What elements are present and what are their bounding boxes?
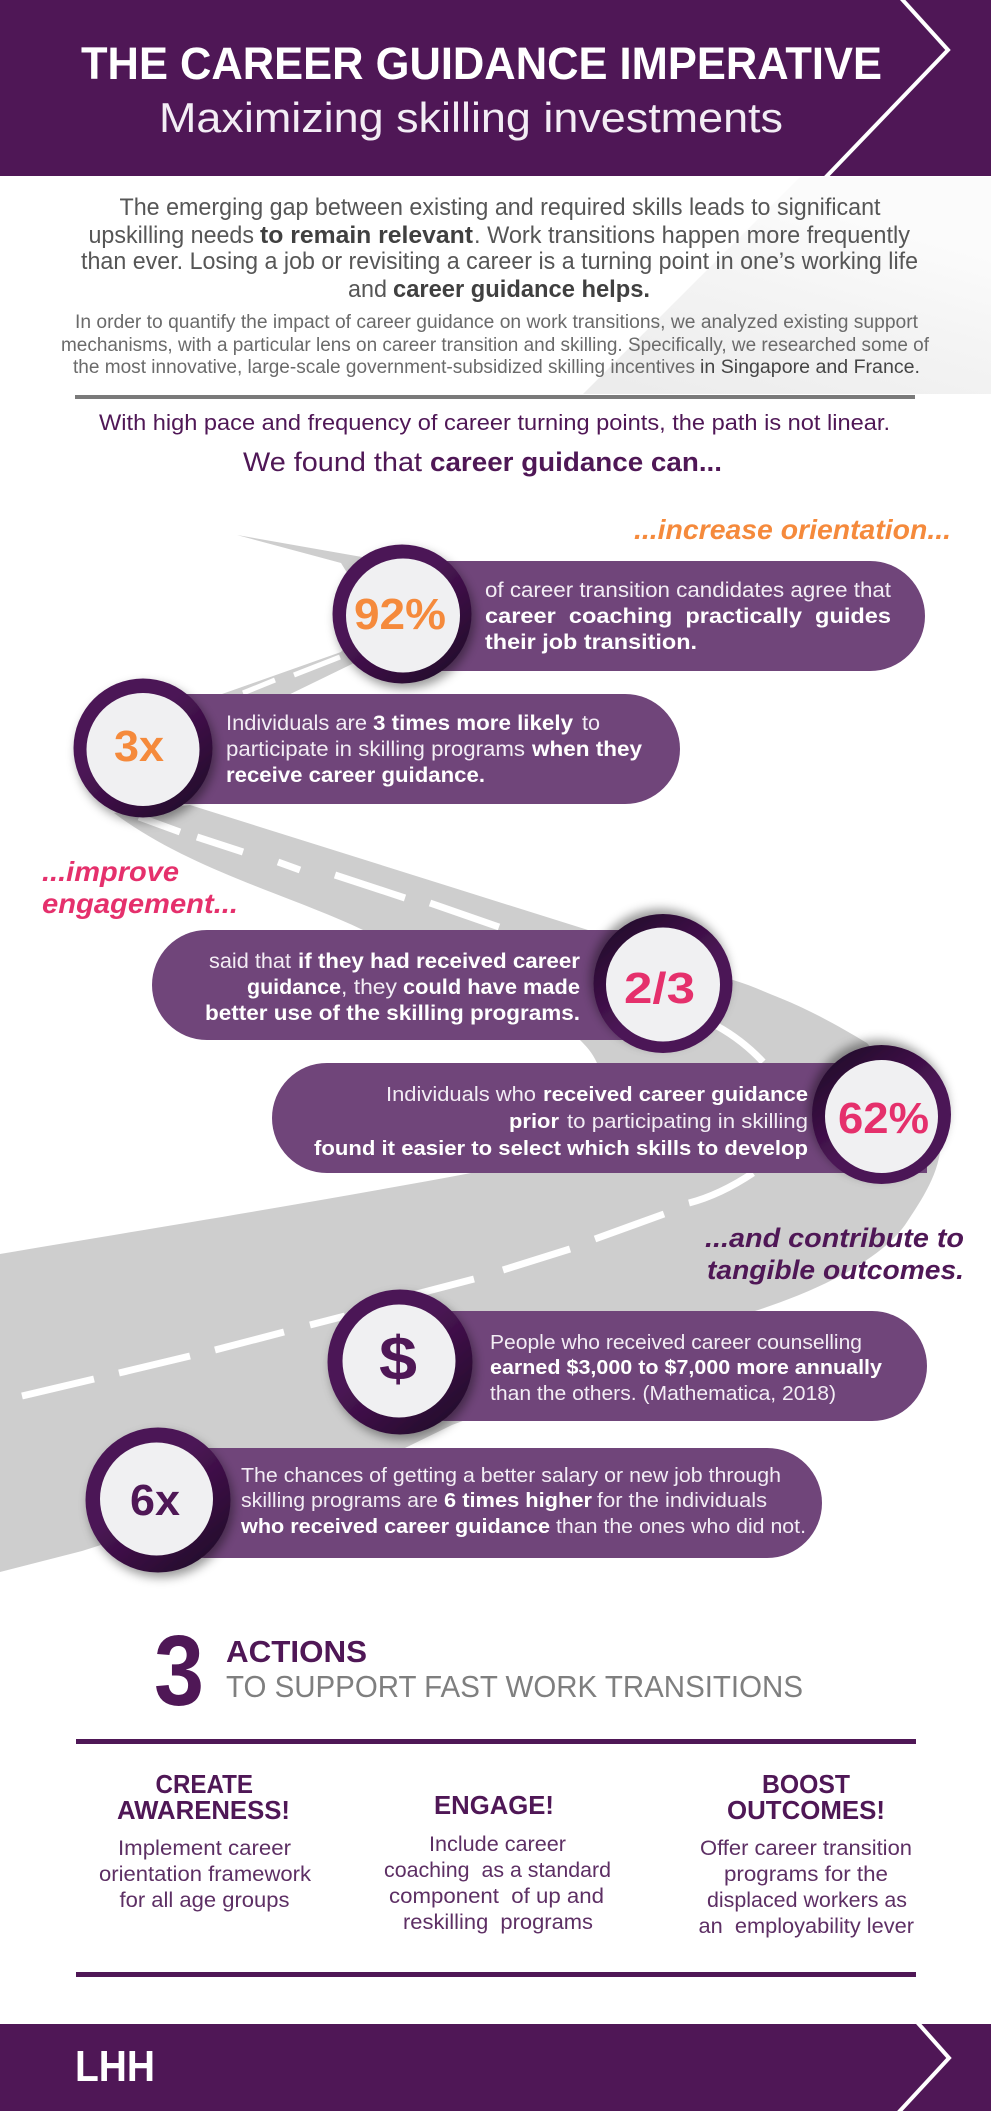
card: 3x: [74, 678, 680, 818]
actions heading: TO SUPPORT FAST WORK TRANSITIONS: [226, 1669, 803, 1704]
action: engage: component of up and: [389, 1885, 604, 1908]
intro text block: The emerging gap between existing and required skills leads to significant: [120, 194, 881, 221]
action: boost outcomes: displaced workers as: [707, 1889, 907, 1912]
card: 6x: skilling programs are: [241, 1490, 438, 1512]
card: 2/3: could have made: [403, 976, 580, 999]
card: 6x: [86, 1428, 822, 1572]
card: 62%: received career guidance: [543, 1084, 808, 1106]
action: boost outcomes: [698, 1769, 914, 1938]
card: 3x: when they: [531, 738, 642, 761]
card: 6x: 6 times higher: [444, 1490, 592, 1512]
action: create awareness: orientation framework: [99, 1863, 312, 1886]
card: 92%: [332, 544, 925, 684]
action: create awareness: Implement career: [118, 1837, 291, 1860]
section label: improve engagement: engagement...: [42, 888, 238, 919]
action: engage: reskilling programs: [403, 1911, 593, 1934]
card: 62%: [272, 1045, 951, 1184]
card: 92%: their job transition.: [485, 631, 697, 654]
action: boost outcomes: Offer career transition: [700, 1837, 912, 1860]
action: engage: Include career: [429, 1833, 566, 1856]
action: create awareness: AWARENESS!: [117, 1795, 290, 1825]
section label: tangible outcomes: tangible outcomes.: [707, 1255, 964, 1285]
card: 2/3: , they: [341, 976, 398, 999]
intro text block: in Singapore and France.: [700, 357, 920, 378]
action: engage: coaching as a standard: [384, 1859, 611, 1882]
intro text block: to remain relevant: [260, 222, 473, 249]
card: 3x: to: [582, 712, 600, 735]
card: 6x: for the individuals: [597, 1490, 767, 1512]
action: create awareness: [99, 1769, 312, 1912]
actions heading: [154, 1615, 803, 1727]
card: 2/3: 2/3: [624, 964, 695, 1013]
section label: tangible outcomes: ...and contribute to: [705, 1223, 964, 1253]
card: 3x: 3 times more likely: [373, 712, 573, 735]
actions heading: ACTIONS: [226, 1634, 367, 1669]
card: 62%: found it easier to select which skills to develop: [314, 1138, 808, 1160]
header banner: [0, 0, 991, 178]
intro text block: career guidance helps.: [393, 276, 650, 303]
card: 6x: 6x: [130, 1476, 181, 1525]
card: 62%: to participating in skilling: [567, 1111, 808, 1133]
card: 2/3: guidance: [247, 976, 341, 999]
card: 3x: Individuals are: [226, 712, 367, 735]
icon: header chevron: [825, 0, 948, 178]
intro text block: the most innovative, large-scale government-subsidized skilling incentives: [73, 357, 695, 378]
action: boost outcomes: OUTCOMES!: [727, 1795, 885, 1825]
intro background shape: [583, 177, 991, 394]
subtitle: Maximizing skilling investments: [159, 94, 783, 141]
section label: improve engagement: ...improve: [42, 856, 179, 887]
card: 6x: who received career guidance: [240, 1516, 550, 1538]
card: 92%: of career transition candidates agree that: [485, 579, 891, 602]
intro text block: [61, 194, 930, 378]
action: boost outcomes: programs for the: [724, 1863, 888, 1886]
intro text block: and: [348, 276, 387, 303]
card: dollar: than the others. (Mathematica, 2018): [490, 1383, 836, 1405]
card: 92%: 92%: [354, 590, 446, 639]
card: 6x: than the ones who did not.: [556, 1516, 806, 1538]
card: 62%: 62%: [838, 1094, 929, 1143]
card: 2/3: [152, 914, 732, 1053]
card: 2/3: better use of the skilling programs.: [205, 1002, 580, 1025]
logo wordmark: LHH: [75, 2042, 155, 2091]
intro text block: mechanisms, with a particular lens on career transition and skilling. Specifically, we researched some of: [61, 335, 930, 356]
card: 2/3: if they had received career: [298, 950, 580, 973]
card: 6x: The chances of getting a better salary or new job through: [241, 1465, 781, 1487]
card: 2/3: said that: [209, 950, 291, 973]
intro text block: upskilling needs: [88, 222, 254, 249]
findings heading: We found that: [243, 447, 423, 477]
winding road: [0, 535, 941, 1572]
title: THE CAREER GUIDANCE IMPERATIVE: [81, 38, 882, 89]
card: 3x: receive career guidance.: [226, 764, 485, 787]
action: engage: [384, 1790, 611, 1934]
findings heading: career guidance can...: [430, 447, 722, 477]
lead-in text: With high pace and frequency of career turning points, the path is not linear.: [99, 410, 890, 435]
intro text block: than ever. Losing a job or revisiting a career is a turning point in one’s working life: [81, 248, 918, 275]
card: dollar: $: [379, 1325, 417, 1394]
action: boost outcomes: an employability lever: [698, 1915, 914, 1938]
intro text block: . Work transitions happen more frequently: [474, 222, 910, 249]
section label: tangible outcomes: [705, 1223, 964, 1285]
card: dollar: [328, 1290, 927, 1434]
action: engage: ENGAGE!: [434, 1790, 554, 1820]
card: dollar: People who received career counselling: [490, 1332, 862, 1354]
card: dollar: earned $3,000 to $7,000 more annually: [490, 1357, 883, 1379]
intro text block: In order to quantify the impact of career guidance on work transitions, we analyzed existing support: [75, 312, 919, 333]
actions heading: 3: [154, 1615, 204, 1727]
section label: improve engagement: [42, 856, 238, 919]
section label: increase orientation: ...increase orientation...: [634, 514, 951, 545]
card: 62%: Individuals who: [386, 1084, 536, 1106]
action: create awareness: CREATE: [156, 1769, 253, 1799]
action: boost outcomes: BOOST: [762, 1769, 850, 1799]
icon: footer chevron: [898, 2022, 949, 2111]
action: create awareness: for all age groups: [120, 1889, 290, 1912]
footer banner: [0, 2022, 991, 2111]
findings heading: [243, 447, 722, 477]
card: 62%: prior: [509, 1111, 559, 1133]
card: 3x: 3x: [114, 722, 165, 771]
card: 3x: participate in skilling programs: [226, 738, 525, 761]
card: 92%: career coaching practically guides: [485, 605, 891, 628]
